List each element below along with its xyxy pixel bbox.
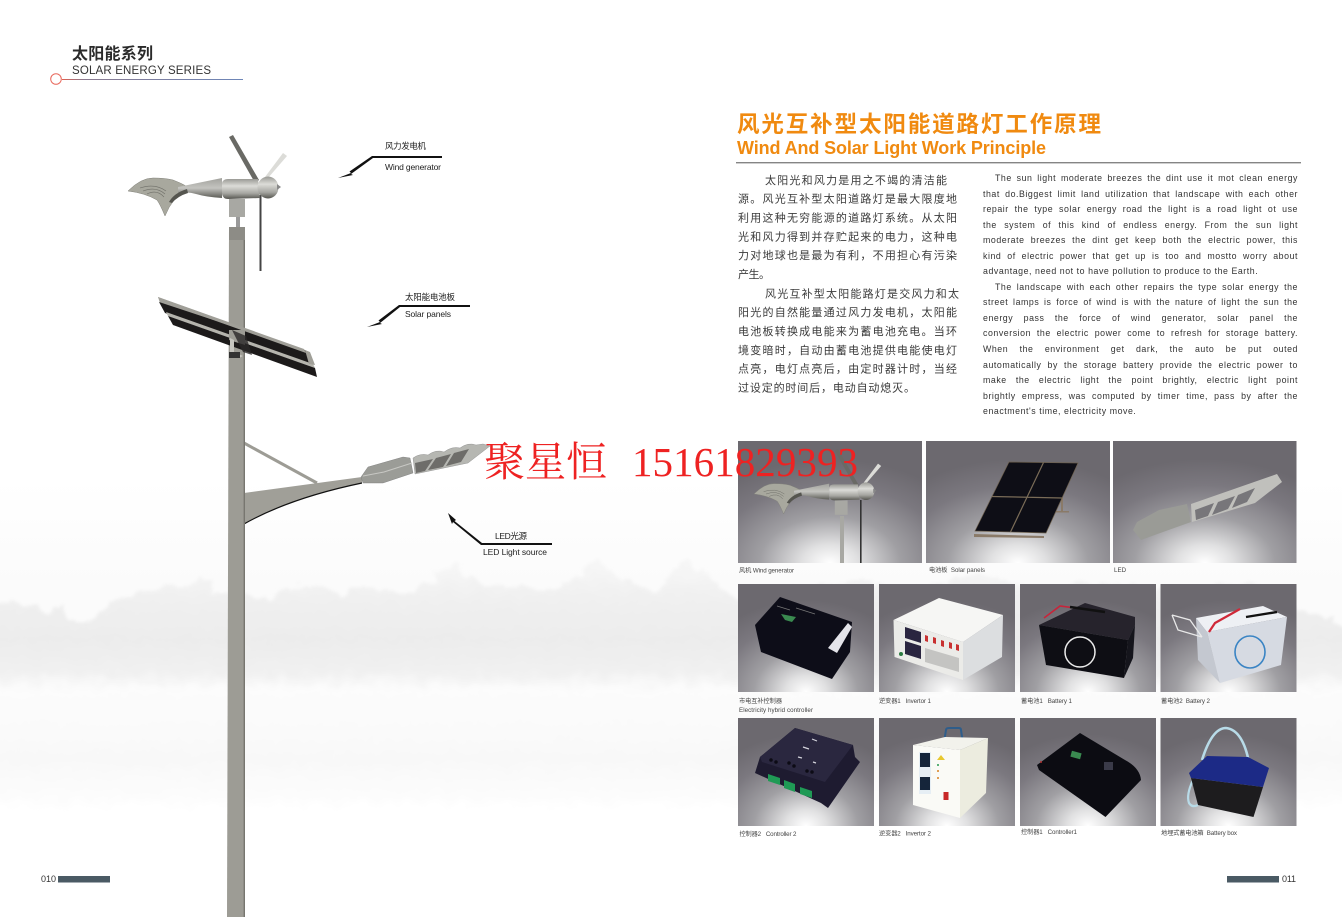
chinese description text: 力对地球也是最为有利，不用担心有污染: [738, 248, 957, 262]
chinese description text: [738, 173, 959, 395]
panel: invertor 1: [879, 584, 1015, 692]
page number: 010: [41, 874, 110, 884]
english description text: moderate breezes the dint get keep both the electric power, this: [983, 235, 1298, 245]
caption: battery 1: 蓄电池1 Battery 1: [1021, 697, 1073, 705]
caption: hybrid controller: 市电互补控制器: [739, 697, 783, 705]
panel: controller 1: [1020, 718, 1156, 826]
english description text: The sun light moderate breezes the dint use it mot clean energy: [995, 173, 1298, 183]
main title: Wind And Solar Light Work Principle: [737, 138, 1046, 158]
caption: controller 1: 控制器1 Controller1: [1021, 828, 1078, 836]
english description text: the system of this kind of endless energy. From the sun light: [983, 220, 1298, 230]
english description text: kind of electric power that get up is too and mostto worry about: [983, 251, 1298, 261]
callout: LED light source: [448, 513, 552, 557]
main title: [736, 112, 1301, 163]
chinese description text: 境变暗时，自动由蓄电池提供电能使电灯: [738, 343, 957, 357]
callout: LED light source: LED Light source: [483, 547, 547, 557]
callout: solar panels: Solar panels: [405, 309, 451, 319]
caption: invertor 2: 逆变器2 Invertor 2: [879, 830, 932, 838]
english description text: energy pass the force of wind generator, solar panel the: [983, 313, 1298, 323]
caption: battery 2: 蓄电池2 Battery 2: [1161, 697, 1211, 705]
wind turbine: [128, 135, 287, 271]
callout: LED light source: LED光源: [495, 531, 527, 541]
panel: solar panels: [926, 441, 1110, 563]
callout: wind generator: 风力发电机: [385, 141, 426, 151]
chinese description text: 风光互补型太阳能路灯是交风力和太: [765, 286, 959, 300]
panel: LED: [1113, 441, 1296, 563]
chinese description text: 利用这种无穷能源的道路灯系统。从太阳: [738, 211, 957, 225]
panel: invertor 2: [879, 718, 1015, 826]
panel: battery box: [1160, 718, 1296, 826]
english description text: enactment's time, electricity move.: [983, 406, 1136, 416]
lamp pole: [227, 227, 245, 917]
english description text: make the electric light the point brightly, electric light point: [983, 375, 1298, 385]
caption: hybrid controller: [739, 697, 813, 714]
caption: battery box: 地埋式蓄电池箱 Battery box: [1161, 829, 1238, 837]
english description text: advantage, need not to have pollution to produce to the Earth.: [983, 266, 1258, 276]
LED lamp head: [361, 444, 490, 483]
english description text: brightly empress, was computed by timer time, pass by after the: [983, 391, 1298, 401]
english description text: The landscape with each other repairs the type solar energy the: [995, 282, 1298, 292]
header: series title: SOLAR ENERGY SERIES: [72, 65, 211, 77]
page number: 010: 010: [41, 874, 56, 884]
english description text: that do.Biggest limit land utilization that landscape with each other: [983, 189, 1298, 199]
page number: 011: 011: [1282, 874, 1296, 884]
panel: hybrid controller: [738, 584, 874, 692]
background: misty forest: [0, 480, 1342, 810]
panel: wind generator: [738, 441, 922, 563]
header: series title: [51, 44, 243, 84]
solar panels on pole: [158, 297, 317, 377]
english description text: repair the type solar energy road the light is a road light ot use: [983, 204, 1298, 214]
lamp arm and strut: [244, 443, 362, 524]
english description text: [983, 173, 1298, 416]
caption: LED: LED: [1114, 567, 1127, 574]
callout: solar panels: [367, 292, 470, 327]
panel: controller 2: [738, 718, 874, 826]
chinese description text: 过设定的时间后，电动自动熄灭。: [738, 381, 915, 395]
caption: wind generator: 风机 Wind generator: [739, 566, 794, 574]
caption: hybrid controller: Electricity hybrid controller: [739, 707, 813, 714]
chinese description text: 点亮，电灯点亮后，由定时器计时，当经: [738, 362, 957, 376]
caption: invertor 1: 逆变器1 Invertor 1: [879, 697, 932, 705]
english description text: conversion the electric power come to refresh for storage battery.: [983, 328, 1298, 338]
header: series title: 太阳能系列: [72, 44, 153, 63]
chinese description text: 阳光的自然能量通过风力发电机，太阳能: [738, 305, 957, 319]
main title: 风光互补型太阳能道路灯工作原理: [737, 112, 1101, 137]
chinese description text: 电池板转换成电能来为蓄电池充电。当环: [738, 324, 957, 338]
english description text: street lamps is force of wind is with the nature of light the sun the: [983, 297, 1298, 307]
chinese description text: 光和风力得到并存贮起来的电力，这种电: [738, 229, 957, 243]
english description text: automatically by the storage battery provide the electric power to: [983, 360, 1298, 370]
panel: battery 1: [1020, 584, 1156, 692]
panel: battery 2: [1160, 584, 1296, 692]
chinese description text: 太阳光和风力是用之不竭的清洁能: [765, 173, 947, 187]
watermark: 聚星恒 15161829393: [484, 439, 858, 485]
caption: solar panels: 电池板 Solar panels: [929, 566, 985, 574]
english description text: When the environment get dark, the auto be put outed: [983, 344, 1298, 354]
page number: 011: [1227, 874, 1296, 884]
callout: wind generator: [338, 141, 442, 178]
caption: controller 2: 控制器2 Controller 2: [740, 830, 797, 838]
callout: solar panels: 太阳能电池板: [405, 292, 455, 302]
chinese description text: 源。风光互补型太阳道路灯是最大限度地: [738, 192, 957, 206]
chinese description text: 产生。: [738, 267, 770, 281]
callout: wind generator: Wind generator: [385, 162, 441, 172]
